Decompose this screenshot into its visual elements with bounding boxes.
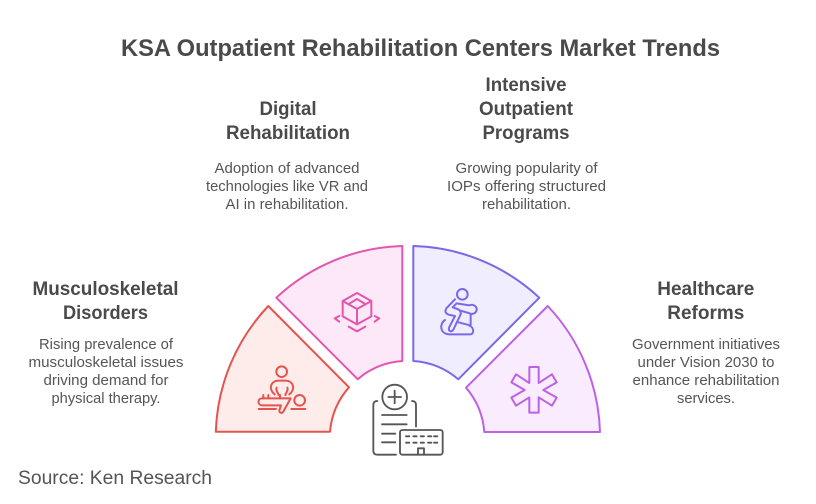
text block: intensive description	[447, 161, 606, 213]
segment: digital rehabilitation	[276, 246, 402, 379]
heading: intensive outpatient programs: Outpatient	[479, 99, 574, 120]
panel: digital rehabilitation text	[206, 99, 368, 213]
text block: healthcare description: services.	[677, 391, 735, 407]
heading: musculoskeletal disorders: Musculoskeletal	[32, 279, 178, 300]
heading: healthcare reforms: Reforms	[667, 303, 744, 324]
text block: digital description: Adoption of advanced	[214, 161, 360, 177]
text block: musculoskeletal description: musculoskeletal issues	[28, 355, 184, 371]
heading: digital rehabilitation: Rehabilitation	[226, 123, 350, 144]
panel: intensive outpatient programs text	[447, 75, 606, 213]
panel: musculoskeletal disorders text	[28, 279, 184, 407]
segment: healthcare reforms	[466, 306, 600, 432]
title: KSA Outpatient Rehabilitation Centers Market Trends	[121, 35, 720, 62]
segment: intensive outpatient programs	[413, 246, 539, 379]
heading: digital rehabilitation: Digital	[260, 99, 316, 120]
heading: intensive outpatient programs	[479, 75, 574, 144]
text block: healthcare description: enhance rehabilitation	[632, 373, 780, 389]
text block: healthcare description	[632, 337, 780, 407]
text block: digital description: AI in rehabilitation.	[226, 197, 348, 213]
heading: intensive outpatient programs: Intensive	[486, 75, 566, 96]
heading: healthcare reforms: Healthcare	[657, 279, 754, 300]
text block: musculoskeletal description	[28, 337, 184, 407]
text block: musculoskeletal description: physical therapy.	[52, 391, 160, 407]
text block: musculoskeletal description: Rising prevalence of	[39, 337, 174, 353]
text block: digital description	[206, 161, 368, 213]
icon: massage therapy	[258, 366, 305, 413]
segment: musculoskeletal disorders	[216, 306, 349, 432]
heading: intensive outpatient programs: Programs	[482, 123, 570, 144]
source note: Source: Ken Research	[18, 468, 212, 489]
text block: intensive description: Growing popularity of	[456, 161, 598, 177]
text block: digital description: technologies like VR and	[206, 179, 368, 195]
text block: healthcare description: under Vision 2030 to	[638, 355, 774, 371]
icon: exercise bike rider	[441, 289, 477, 334]
heading: healthcare reforms	[657, 279, 754, 324]
icon: medical asterisk	[511, 367, 557, 413]
text block: healthcare description: Government initiatives	[632, 337, 780, 353]
panel: healthcare reforms text	[632, 279, 780, 407]
heading: musculoskeletal disorders: Disorders	[63, 303, 148, 324]
heading: musculoskeletal disorders	[32, 279, 178, 324]
icon: VR cube	[335, 293, 379, 331]
text block: intensive description: rehabilitation.	[482, 197, 571, 213]
text block: musculoskeletal description: driving demand for	[44, 373, 169, 389]
icon: hospital and medical record	[373, 385, 443, 455]
heading: digital rehabilitation	[226, 99, 350, 144]
text block: intensive description: IOPs offering structured	[447, 179, 606, 195]
